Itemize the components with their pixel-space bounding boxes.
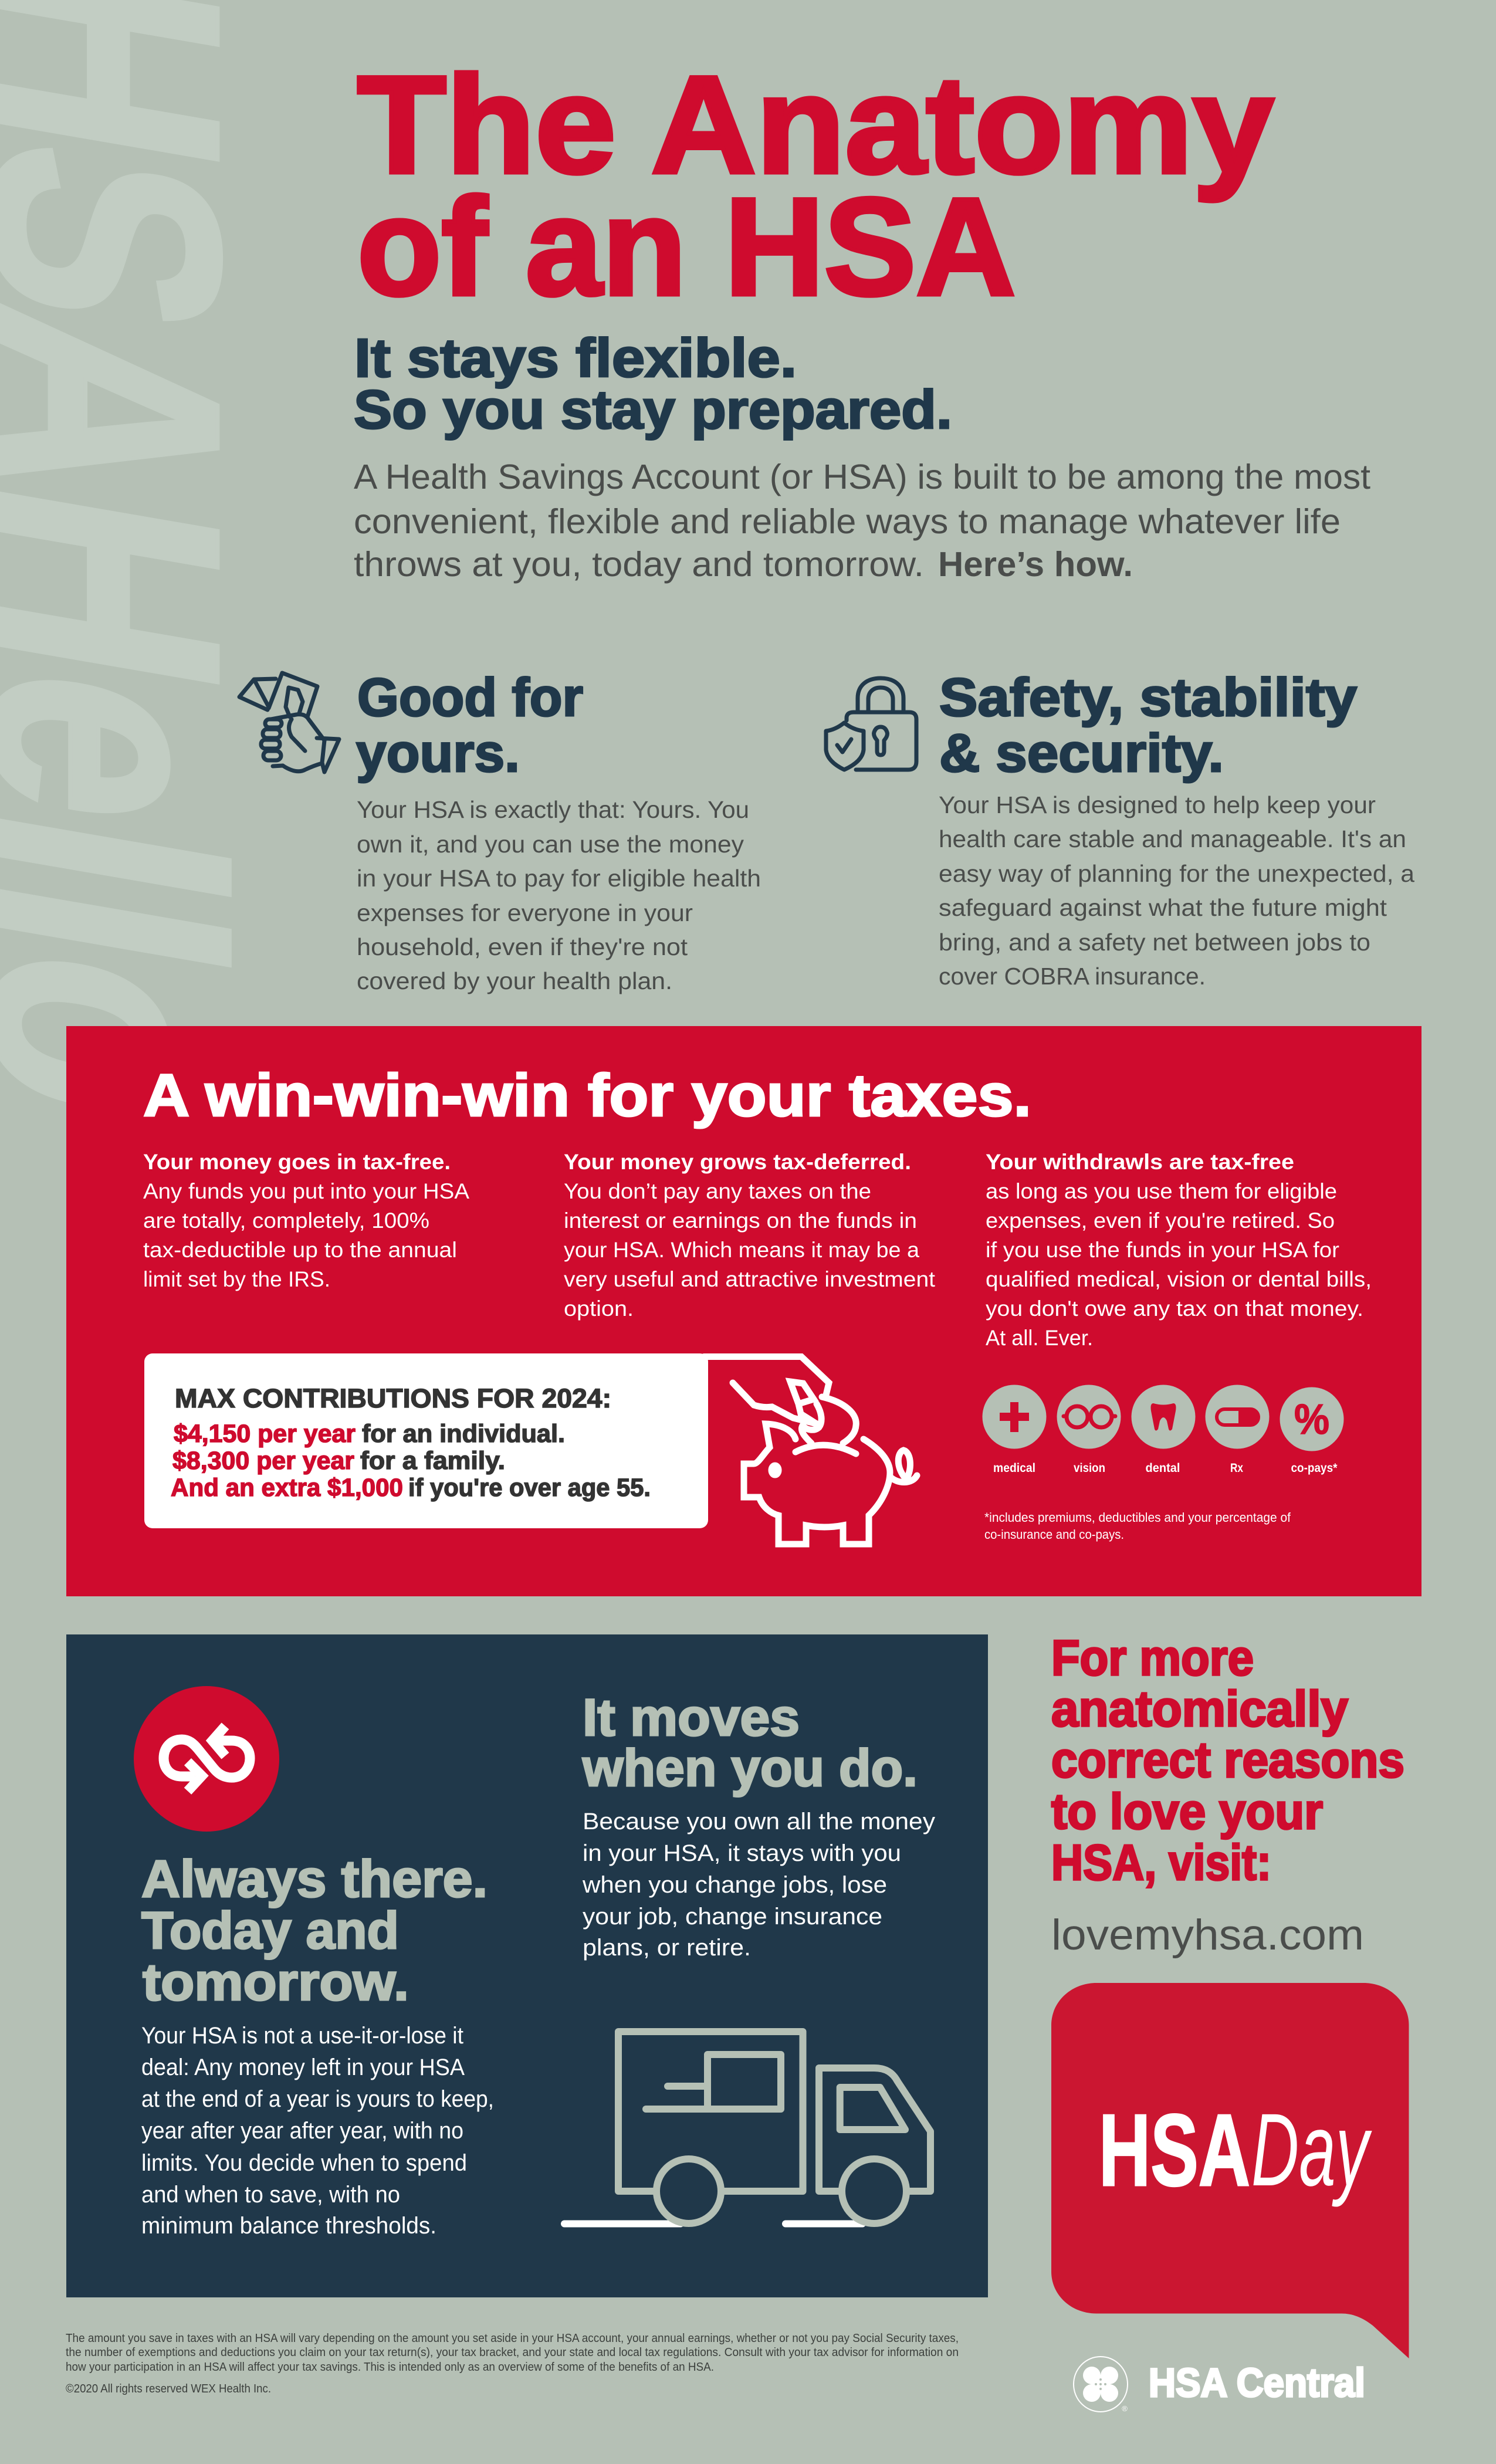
disclaimer footnote: the number of exemptions and deductions you claim on your tax return(s), your tax bracket, and your state and local tax regulations. Consult with your tax advisor for information on	[66, 2346, 959, 2359]
intro paragraph: A Health Savings Account (or HSA) is built to be among the most	[354, 458, 1370, 496]
text: good for yours: Your HSA is exactly that: Yours. You	[357, 796, 749, 823]
column: tax-deferred: interest or earnings on the funds in	[564, 1209, 917, 1233]
text: good for yours: household, even if they're not	[357, 933, 688, 960]
text: good for yours: expenses for everyone in your	[357, 899, 693, 926]
speech bubble: HSA Day logo	[1051, 1983, 1409, 2358]
callout: max contributions: for a family.	[360, 1447, 505, 1475]
text: it moves: your job, change insurance	[583, 1904, 882, 1930]
icon: co-pays	[1280, 1387, 1343, 1475]
text: always there: year after year after year, with no	[141, 2118, 463, 2144]
column: tax-free: are totally, completely, 100%	[143, 1209, 429, 1233]
panel: safety stability security	[826, 668, 1414, 990]
icon: hand holding money	[239, 673, 339, 772]
column: withdrawals	[986, 1150, 1372, 1350]
icon: piggy bank	[704, 1356, 917, 1544]
column: tax-deferred: your HSA. Which means it may be a	[564, 1238, 919, 1262]
icon: flower seal	[1074, 2357, 1128, 2413]
text: good for yours: own it, and you can use the money	[357, 831, 744, 858]
text: always there: deal: Any money left in your HSA	[141, 2055, 465, 2080]
icon: medical: medical	[993, 1461, 1035, 1475]
callout: max contributions: $8,300 per year	[172, 1447, 354, 1475]
icon: vision: vision	[1074, 1461, 1105, 1475]
icon: co-pays: %	[1294, 1396, 1329, 1443]
text: safety: Your HSA is designed to help keep your	[939, 791, 1376, 818]
icon: dental	[1131, 1385, 1196, 1475]
column: withdrawals: you don't owe any tax on that money.	[986, 1297, 1363, 1321]
title	[357, 48, 1274, 324]
text: it moves: plans, or retire.	[583, 1935, 751, 1961]
callout: learn more: correct reasons	[1051, 1732, 1404, 1788]
heading: good for yours	[356, 668, 583, 783]
footnote: co-pays	[984, 1510, 1291, 1542]
icon: Rx: Rx	[1230, 1461, 1243, 1475]
text: safety: easy way of planning for the unexpected, a	[939, 860, 1414, 887]
callout: learn more	[1051, 1630, 1404, 1891]
footnote: co-pays: *includes premiums, deductibles and your percentage of	[984, 1510, 1291, 1525]
text: it moves: Because you own all the money	[583, 1809, 935, 1835]
speech bubble: HSA Day logo: HSA	[1099, 2093, 1250, 2207]
text: good for yours: in your HSA to pay for eligible health	[357, 865, 761, 892]
heading: safety: Safety, stability	[939, 668, 1357, 727]
column: tax-deferred	[564, 1150, 936, 1321]
intro paragraph	[354, 458, 1370, 584]
panel: navy always there	[66, 1634, 988, 2297]
column: tax-free: tax-deductible up to the annual	[143, 1238, 457, 1262]
heading: good for yours: yours.	[356, 723, 520, 783]
logo: HSA Central: HSA Central	[1149, 2360, 1365, 2405]
heading: safety	[939, 668, 1357, 783]
icon: vision	[1057, 1385, 1121, 1475]
callout: learn more: HSA, visit:	[1051, 1835, 1271, 1891]
text: good for yours: covered by your health plan.	[357, 967, 672, 994]
column: tax-free	[143, 1150, 469, 1291]
subtitle	[354, 327, 952, 440]
disclaimer footnote	[66, 2332, 959, 2395]
column: withdrawals: expenses, even if you're retired. So	[986, 1209, 1335, 1233]
title: The Anatomy	[357, 48, 1274, 202]
column: tax-free: Any funds you put into your HSA	[143, 1179, 469, 1203]
icon: moving truck	[564, 2032, 930, 2223]
callout: learn more: For more	[1051, 1630, 1254, 1686]
icon: Rx	[1205, 1385, 1270, 1475]
column: tax-deferred: very useful and attractive investment	[564, 1267, 936, 1291]
intro paragraph: Here’s how.	[938, 545, 1133, 584]
column: withdrawals: Your withdrawls are tax-free	[986, 1150, 1294, 1174]
subtitle: It stays flexible.	[354, 327, 797, 388]
logo: HSA Central	[1074, 2357, 1365, 2413]
panel: good for yours	[239, 668, 761, 994]
icon: flower seal: ®	[1122, 2404, 1128, 2413]
column: tax-free: Your money goes in tax-free.	[143, 1150, 451, 1174]
callout: learn more: to love your	[1051, 1784, 1323, 1840]
heading: always there: Today and	[141, 1901, 399, 1959]
icons: medical expense row	[982, 1385, 1343, 1475]
text: safety: cover COBRA insurance.	[939, 963, 1206, 990]
callout: max contributions	[144, 1353, 708, 1528]
column: withdrawals: qualified medical, vision or dental bills,	[986, 1267, 1372, 1291]
heading: it moves: when you do.	[582, 1738, 918, 1797]
intro paragraph: throws at you, today and tomorrow.	[354, 545, 924, 584]
text: always there: and when to save, with no	[141, 2182, 400, 2208]
title: of an HSA	[357, 170, 1016, 324]
disclaimer footnote: The amount you save in taxes with an HSA will vary depending on the amount you set aside in your HSA account, your annual earnings, whether or not you pay Social Security taxes,	[66, 2332, 959, 2345]
heading: good for yours: Good for	[357, 668, 583, 727]
text: always there: minimum balance thresholds.	[141, 2213, 436, 2239]
callout: max contributions: MAX CONTRIBUTIONS FOR 2024:	[175, 1383, 611, 1413]
heading: taxes: A win-win-win for your taxes.	[143, 1062, 1031, 1129]
text: always there	[141, 2023, 494, 2239]
callout: learn more: anatomically	[1051, 1681, 1348, 1737]
callout: max contributions: for an individual.	[362, 1420, 565, 1448]
column: withdrawals: as long as you use them for eligible	[986, 1179, 1337, 1203]
icon: lock and shield	[826, 678, 916, 770]
text: safety: health care stable and manageable. It's an	[939, 825, 1406, 852]
icon: dental: dental	[1145, 1461, 1180, 1475]
footnote: co-pays: co-insurance and co-pays.	[984, 1527, 1124, 1542]
icon: infinity arrows	[134, 1686, 279, 1832]
text: safety: bring, and a safety net between jobs to	[939, 929, 1370, 956]
text: always there: limits. You decide when to spend	[141, 2150, 467, 2176]
column: withdrawals: At all. Ever.	[986, 1326, 1093, 1350]
heading: always there: Always there.	[141, 1849, 488, 1908]
callout: max contributions: $4,150 per year	[174, 1420, 356, 1448]
column: tax-deferred: Your money grows tax-deferred.	[564, 1150, 911, 1174]
disclaimer footnote: ©2020 All rights reserved WEX Health Inc.	[66, 2382, 271, 2395]
icon: co-pays: co-pays*	[1291, 1461, 1338, 1475]
heading: it moves: It moves	[583, 1688, 800, 1747]
intro paragraph: convenient, flexible and reliable ways to manage whatever life	[354, 502, 1341, 541]
text: always there: Your HSA is not a use-it-or-lose it	[141, 2023, 463, 2049]
speech bubble: HSA Day logo: Day	[1251, 2093, 1372, 2208]
text: it moves: in your HSA, it stays with you	[583, 1840, 901, 1866]
icon: medical	[982, 1385, 1047, 1475]
callout: max contributions: And an extra $1,000	[171, 1474, 403, 1502]
text: safety	[939, 791, 1414, 990]
column: tax-free: limit set by the IRS.	[143, 1267, 330, 1291]
text: it moves: when you change jobs, lose	[582, 1872, 887, 1898]
column: tax-deferred: You don’t pay any taxes on the	[564, 1179, 871, 1203]
callout: max contributions: if you're over age 55.	[408, 1474, 651, 1502]
text: it moves	[582, 1809, 935, 1961]
heading: always there: tomorrow.	[143, 1952, 409, 2011]
heading: safety: & security.	[939, 723, 1224, 783]
disclaimer footnote: how your participation in an HSA will affect your tax savings. This is intended only as an overview of some of the benefits of an HSA.	[66, 2361, 714, 2374]
subtitle: So you stay prepared.	[354, 379, 952, 440]
text: good for yours	[357, 796, 761, 994]
column: withdrawals: if you use the funds in your HSA for	[986, 1238, 1339, 1262]
heading: always there	[141, 1849, 488, 2011]
text: always there: at the end of a year is yours to keep,	[141, 2086, 494, 2112]
heading: it moves	[582, 1688, 918, 1797]
panel: taxes	[66, 1026, 1421, 1596]
column: tax-deferred: option.	[564, 1297, 634, 1321]
text: safety: safeguard against what the future might	[939, 894, 1387, 921]
link text: lovemyhsa.com: lovemyhsa.com	[1051, 1911, 1364, 1959]
